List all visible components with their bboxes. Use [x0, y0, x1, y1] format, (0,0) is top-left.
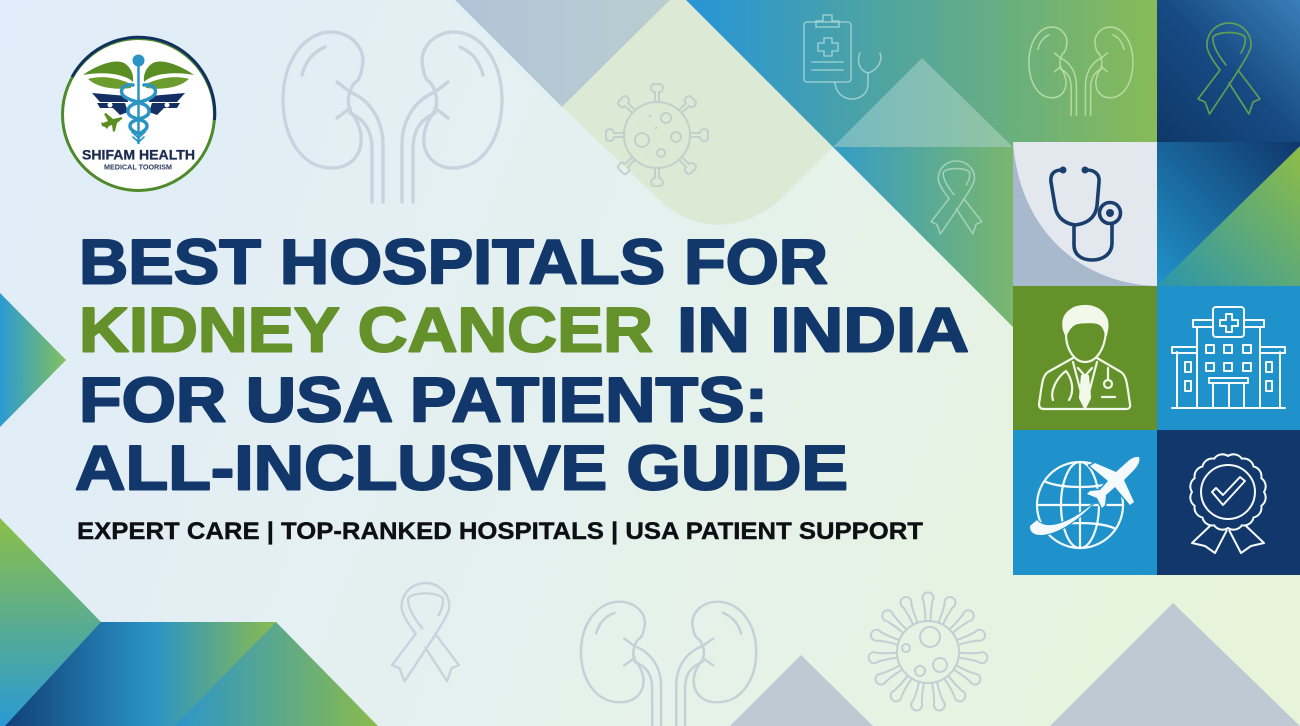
- icon: kidneys large: [283, 32, 502, 202]
- shape: left arrow: [0, 293, 66, 427]
- tile: globe and plane: [1013, 430, 1157, 575]
- title line 2: highlight: KIDNEY CANCER: [79, 296, 653, 366]
- tile: doctor: [1013, 286, 1157, 430]
- panel: gradient band top right: [686, 0, 1157, 147]
- title line 1: BEST HOSPITALS FOR: [79, 228, 828, 298]
- title line 2: remainder: IN INDIA: [677, 296, 969, 366]
- panel: top right navy tile: [1157, 0, 1300, 142]
- shape: bottom grey triangle large: [1050, 603, 1300, 726]
- tile: award badge: [1157, 430, 1300, 575]
- icon: clipboard with stethoscope: [804, 15, 881, 99]
- icon: ribbon on navy tile: [1198, 23, 1260, 114]
- title line 3: FOR USA PATIENTS:: [79, 366, 768, 436]
- tile: gradient triangle: [1157, 142, 1300, 286]
- panel: grey diamond top: [455, 0, 670, 107]
- logo: [62, 37, 215, 191]
- icon: kidneys top right: [1029, 27, 1133, 115]
- logo: right wing: [144, 61, 194, 115]
- tile: hospital: [1157, 286, 1300, 430]
- subtitle: EXPERT CARE | TOP-RANKED HOSPITALS | USA PATIENT SUPPORT: [77, 518, 923, 545]
- logo: plane: [101, 113, 122, 132]
- icon: ribbon in band: [931, 161, 982, 234]
- shape: bottom left triangle: [0, 518, 110, 726]
- title line 4: ALL-INCLUSIVE GUIDE: [75, 434, 848, 504]
- tile: stethoscope: [1013, 142, 1157, 286]
- icon: ribbon bottom: [392, 583, 459, 681]
- panel: pale green rounded shape: [562, 0, 833, 225]
- shape: bottom teal triangle: [174, 622, 378, 726]
- title: [75, 228, 969, 504]
- logo: left wing: [83, 61, 133, 115]
- logo: tagline: MEDICAL TOORISM: [104, 162, 172, 172]
- panel: gradient triangle under band: [833, 147, 1013, 327]
- shape: bottom grey triangle small: [730, 655, 873, 726]
- icon: virus bottom: [868, 592, 988, 712]
- logo: caduceus: [122, 54, 155, 143]
- icon: kidneys bottom: [581, 602, 756, 726]
- icon: virus top: [606, 84, 708, 186]
- shape: bottom left band: [5, 622, 276, 726]
- logo: name: SHIFAM HEALTH: [82, 146, 195, 162]
- panel: translucent triangle: [833, 58, 1013, 147]
